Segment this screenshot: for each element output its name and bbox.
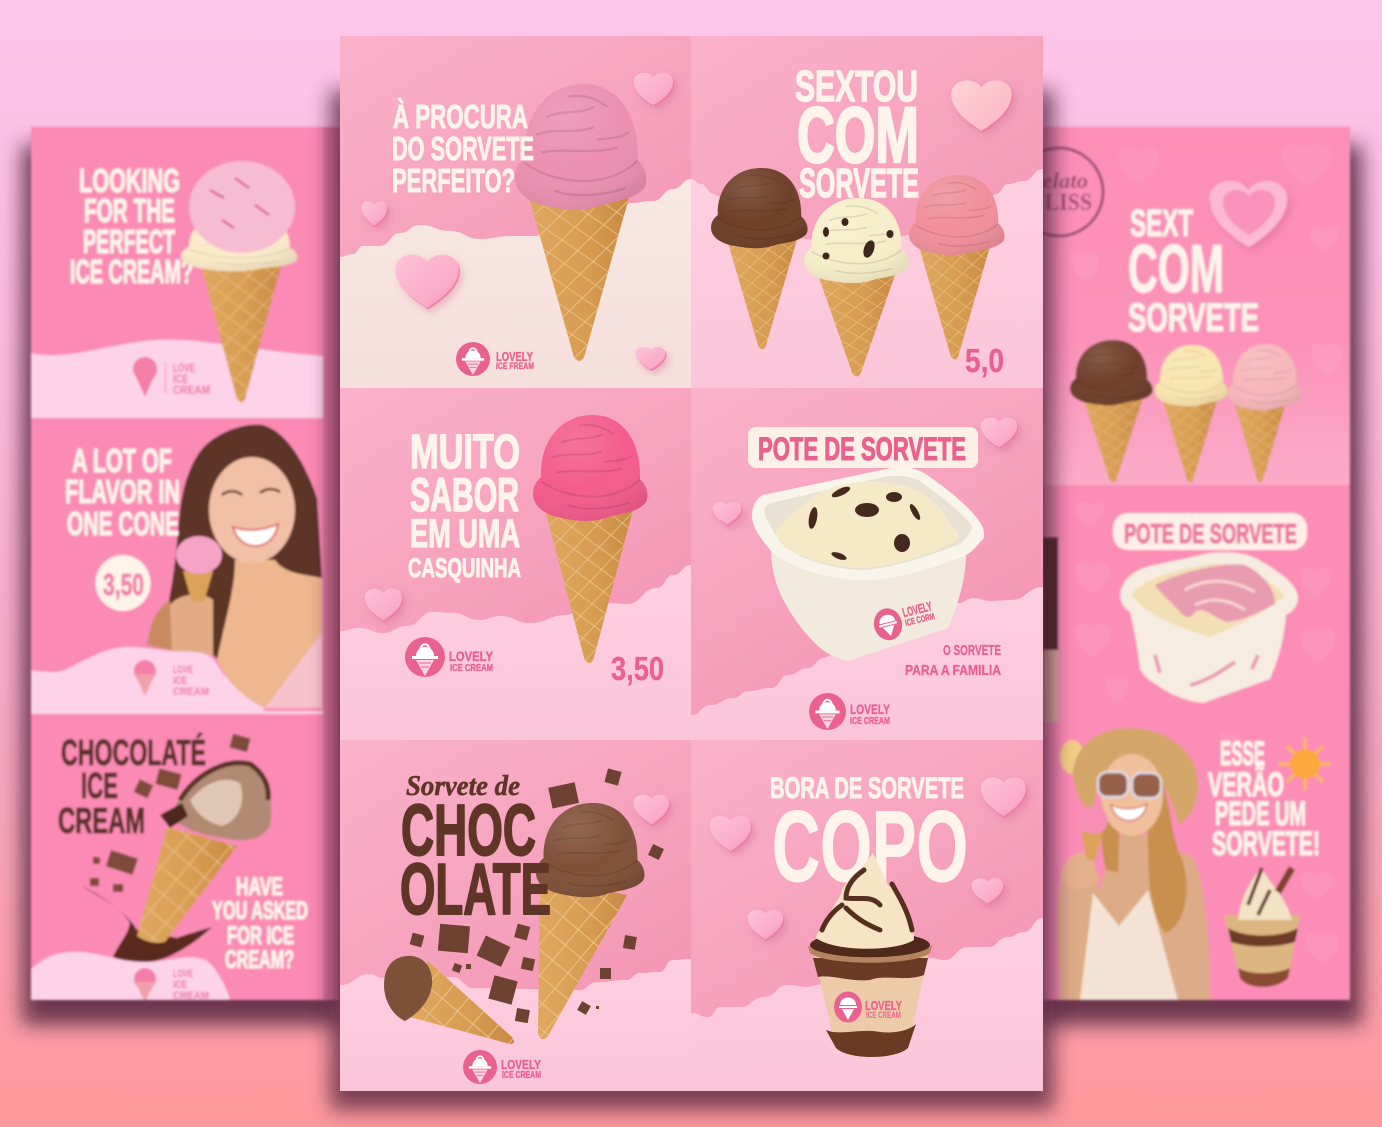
cream wave bbox=[340, 179, 691, 388]
icon: pink cone bbox=[533, 415, 647, 663]
icon: chocolate cone bbox=[536, 803, 645, 1039]
logo: lovely ice cream bbox=[405, 637, 494, 677]
price badge 3,50 bbox=[96, 555, 150, 611]
text: have you asked for ice cream bbox=[212, 873, 308, 974]
tile 6: bora de sorvete copo bbox=[691, 740, 1043, 1091]
tile 5: sorvete de chocolate bbox=[340, 740, 691, 1091]
text: o sorvete para a familia: O SORVETE bbox=[943, 642, 1001, 659]
tile: chocolate ice cream bbox=[31, 732, 308, 1002]
tile 1: à procura do sorvete perfeito bbox=[340, 36, 691, 388]
heading: chocolate ice cream: CREAM bbox=[58, 800, 145, 841]
price: 3,50: 3,50 bbox=[611, 650, 664, 687]
logo: lovely ice cream: ICE CREAM bbox=[502, 1070, 541, 1081]
price: 5,0: 5,0 bbox=[965, 342, 1004, 379]
heading: muito sabor em uma casquinha: EM UMA bbox=[410, 512, 520, 556]
logo: love ice cream: ICE bbox=[173, 372, 188, 386]
logo on cup bbox=[834, 992, 903, 1022]
light wave bbox=[340, 959, 691, 1091]
icon: strawberry cone bbox=[909, 175, 1005, 359]
heading: a lot of flavor in one cone: ONE CONE bbox=[67, 505, 179, 542]
tile: esse verão pede um sorvete bbox=[1043, 722, 1350, 1000]
heading: sextou com sorvete: COM bbox=[797, 90, 919, 179]
tile 2: sextou com sorvete bbox=[691, 36, 1043, 388]
icon: lying cone bbox=[384, 956, 514, 1044]
heading: esse verão pede um sorvete: PEDE UM bbox=[1215, 795, 1306, 833]
icon: pink ice cream cone bbox=[515, 84, 646, 361]
logo: lovely ice cream: ICE CREAM bbox=[450, 662, 493, 674]
heading: chocolate ice cream: ICE bbox=[81, 765, 118, 806]
logo: love ice cream: LOVE bbox=[173, 664, 193, 676]
heading: looking for the perfect ice cream: LOOKING bbox=[79, 162, 180, 199]
tile: looking for the perfect ice cream bbox=[31, 161, 323, 416]
heading: à procura do sorvete perfeito: DO SORVETE bbox=[392, 130, 534, 167]
logo on cup: ICE CREAM bbox=[866, 1010, 901, 1020]
logo: lovely ice fream bbox=[456, 342, 534, 376]
icon: sun bbox=[1279, 738, 1331, 790]
light wave bbox=[691, 918, 1043, 1091]
heading: chocolate ice cream bbox=[58, 732, 206, 841]
heading: looking for the perfect ice cream bbox=[70, 162, 193, 290]
heading: sorvete de chocolate bbox=[400, 770, 551, 930]
heading: esse verão pede um sorvete: VERÃO bbox=[1208, 766, 1284, 804]
logo on tub: ICE CORM bbox=[904, 611, 936, 628]
icon: chocolate cone bbox=[711, 168, 808, 349]
light wave bbox=[691, 169, 1043, 388]
icon: strawberry ice cream cone bbox=[181, 161, 297, 402]
label: pote de sorvete bbox=[1113, 513, 1307, 550]
heading: looking for the perfect ice cream: ICE CREAM? bbox=[70, 253, 193, 290]
icon: heart small right bbox=[972, 878, 1003, 903]
light wave bbox=[340, 565, 691, 740]
logo: lovely ice fream: ICE FREAM bbox=[496, 361, 534, 372]
heading: sext com sorvete bbox=[1128, 203, 1259, 340]
icon: heart top right bbox=[634, 73, 673, 105]
icon: tilted chocolate cone bbox=[137, 761, 271, 943]
logo: lovely ice cream: ICE CREAM bbox=[850, 716, 890, 727]
text: o sorvete para a familia bbox=[905, 642, 1001, 679]
heading: muito sabor em uma casquinha bbox=[408, 426, 521, 583]
faint background hearts bbox=[1220, 732, 1338, 963]
logo on tub bbox=[871, 597, 938, 643]
logo: lovely ice cream bbox=[463, 1050, 541, 1084]
heading: copo: COPO bbox=[772, 791, 968, 903]
heading: chocolate ice cream: CHOCOLATÉ bbox=[61, 732, 206, 773]
icon: large heart bbox=[395, 255, 459, 308]
text: have you asked for ice cream: YOU ASKED bbox=[212, 897, 308, 925]
heading: sext com sorvete: SORVETE bbox=[1128, 296, 1259, 340]
heading: à procura do sorvete perfeito: PERFEITO? bbox=[392, 162, 515, 199]
logo: gelato bliss: Gelato bbox=[1026, 168, 1088, 193]
text: have you asked for ice cream: HAVE bbox=[236, 873, 283, 901]
illustration: smiling woman bbox=[147, 425, 322, 708]
heading: muito sabor em uma casquinha: CASQUINHA bbox=[408, 553, 521, 583]
right mockup panel bbox=[1015, 127, 1350, 1000]
logo: love ice cream bbox=[134, 660, 209, 698]
heading: à procura do sorvete perfeito: À PROCURA bbox=[393, 98, 528, 135]
logo: love ice cream bbox=[134, 968, 209, 1002]
illustration: sundae cup bbox=[807, 853, 933, 1057]
heading: muito sabor em uma casquinha: MUITO bbox=[410, 426, 520, 479]
text: o sorvete para a familia: PARA A FAMILIA bbox=[905, 662, 1001, 679]
logo: love ice cream: ICE bbox=[173, 675, 187, 687]
logo: love ice cream: CREAM bbox=[173, 686, 209, 698]
heading: esse verão pede um sorvete bbox=[1208, 735, 1320, 863]
centre sheet bbox=[340, 36, 1043, 1091]
faint background hearts bbox=[1076, 502, 1335, 702]
heading: muito sabor em uma casquinha: SABOR bbox=[410, 468, 519, 521]
icon: heart bbox=[365, 589, 402, 620]
icon: vanilla chip cone bbox=[804, 198, 909, 376]
tile: a lot of flavor in one cone bbox=[31, 425, 322, 712]
tile: sext com sorvete bbox=[1015, 144, 1343, 483]
icon: sundae bbox=[1224, 868, 1300, 987]
light wave bbox=[691, 587, 1043, 740]
logo: lovely ice cream bbox=[809, 693, 890, 730]
chocolate chunks bbox=[90, 734, 251, 892]
heading: à procura do sorvete perfeito bbox=[392, 98, 534, 199]
heading: a lot of flavor in one cone: A LOT OF bbox=[72, 442, 172, 479]
illustration: ice cream tub bbox=[752, 467, 984, 661]
heading: esse verão pede um sorvete: ESSE bbox=[1220, 735, 1265, 773]
logo: love ice cream: CREAM bbox=[173, 990, 209, 1002]
heading: bora de sorvete: BORA DE SORVETE bbox=[770, 772, 964, 805]
side panel shadows bbox=[22, 145, 1362, 1025]
icon: three ice cream cones bbox=[1070, 340, 1302, 483]
icon: heart bbox=[1210, 181, 1287, 248]
logo: lovely ice cream: LOVELY bbox=[501, 1057, 541, 1072]
logo: gelato bliss bbox=[1015, 148, 1103, 236]
icon: heart left bbox=[713, 502, 741, 524]
heading: sext com sorvete: SEXT bbox=[1130, 203, 1193, 245]
logo: love ice cream: LOVE bbox=[173, 361, 195, 375]
heading: sorvete de chocolate: CHOC bbox=[401, 791, 536, 871]
left mockup panel bbox=[31, 127, 340, 1002]
heading: a lot of flavor in one cone bbox=[65, 442, 180, 542]
price badge 3,50: 3,50 bbox=[103, 567, 144, 602]
logo: lovely ice fream: LOVELY bbox=[496, 350, 534, 364]
faint background hearts bbox=[1071, 144, 1343, 375]
heading: sextou com sorvete: SORVETE bbox=[799, 160, 919, 206]
logo: love ice cream: LOVE bbox=[173, 968, 193, 980]
logo: lovely ice cream: LOVELY bbox=[850, 702, 890, 717]
tile 3: muito sabor em uma casquinha bbox=[340, 388, 691, 740]
icon: heart left bbox=[362, 201, 387, 225]
tile: pote de sorvete bbox=[1043, 485, 1350, 722]
icon: heart left bbox=[710, 816, 751, 851]
logo: gelato bliss: BLISS bbox=[1030, 190, 1092, 216]
heading: sorvete de chocolate: OLATE bbox=[400, 850, 551, 930]
text: have you asked for ice cream: FOR ICE bbox=[227, 922, 294, 950]
logo: love ice cream: CREAM bbox=[173, 383, 210, 397]
heading: sorvete de chocolate: Sorvete de bbox=[406, 770, 520, 802]
icon: heart bbox=[951, 80, 1012, 131]
label: pote de sorvete bbox=[748, 427, 978, 468]
heading: sextou com sorvete: SEXTOU bbox=[795, 62, 918, 111]
icon: heart right bbox=[981, 777, 1026, 816]
text: have you asked for ice cream: CREAM? bbox=[225, 946, 294, 974]
heading: a lot of flavor in one cone: FLAVOR IN bbox=[65, 473, 180, 510]
logo: love ice cream bbox=[133, 357, 210, 397]
logo on cup: LOVELY bbox=[865, 999, 903, 1013]
label: pote de sorvete: POTE DE SORVETE bbox=[758, 431, 966, 467]
icon: heart bbox=[634, 795, 669, 824]
heading: looking for the perfect ice cream: FOR THE bbox=[84, 192, 175, 229]
icon: heart bottom right bbox=[636, 347, 665, 370]
label: pote de sorvete: POTE DE SORVETE bbox=[1124, 518, 1297, 549]
centre sheet shadow bbox=[330, 90, 1054, 1110]
icon: heart lower left bbox=[748, 910, 783, 939]
icon: heart top right bbox=[981, 418, 1017, 447]
heading: sextou com sorvete bbox=[795, 62, 919, 206]
heading: esse verão pede um sorvete: SORVETE! bbox=[1212, 825, 1320, 863]
logo: lovely ice cream: LOVELY bbox=[449, 648, 494, 664]
illustration: woman with straw hat bbox=[1058, 728, 1210, 1000]
heading: sext com sorvete: COM bbox=[1128, 231, 1224, 307]
logo: love ice cream: ICE bbox=[173, 979, 187, 991]
chocolate chunks bbox=[410, 768, 664, 1023]
logo on tub: LOVELY bbox=[901, 598, 934, 620]
illustration: chocolate splash bbox=[82, 886, 212, 962]
heading: looking for the perfect ice cream: PERFECT bbox=[83, 223, 175, 260]
tile 4: pote de sorvete bbox=[691, 388, 1043, 740]
illustration: ice cream tub bbox=[1120, 552, 1298, 703]
